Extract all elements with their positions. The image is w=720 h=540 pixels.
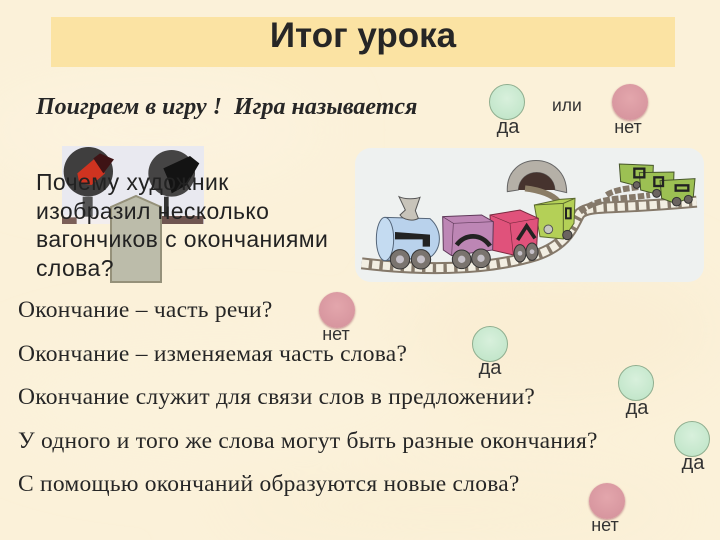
legend: or: или	[552, 95, 582, 115]
tracks	[362, 202, 697, 268]
illustration: railway signals	[62, 146, 204, 224]
question about the picture: Почему художник изобразил несколько вагончиков с окончаниями слова?	[36, 169, 328, 281]
locomotive	[385, 217, 439, 261]
legend: yes button: да	[497, 116, 519, 138]
chimney	[399, 197, 420, 220]
answer 5: no: нет	[591, 515, 619, 535]
pink wagon	[490, 210, 538, 255]
game intro text: Поиграем в игру ! Игра называется	[36, 94, 417, 120]
far wagons	[619, 164, 695, 203]
answer 3: yes	[618, 365, 654, 419]
answer 3: yes: да	[626, 397, 648, 419]
answer 1: no	[318, 292, 356, 344]
legend: no button: нет	[614, 117, 642, 137]
quiz question 4: У одного и того же слова могут быть разные окончания?	[18, 428, 598, 454]
legend: yes button	[489, 84, 525, 138]
answer 4: yes: да	[682, 452, 704, 474]
quiz question 2: Окончание – изменяемая часть слова?	[18, 341, 407, 367]
signal post	[110, 195, 162, 283]
answer 1: no: нет	[322, 324, 350, 344]
wheels	[390, 243, 538, 269]
quiz question 1: Окончание – часть речи?	[18, 297, 273, 323]
answer 5: no	[588, 482, 626, 535]
quiz question 3: Окончание служит для связи слов в предложении?	[18, 384, 535, 410]
legend: no button	[610, 84, 650, 137]
answer 4: yes	[674, 421, 710, 474]
quiz question 5: С помощью окончаний образуются новые слова?	[18, 471, 520, 497]
title banner	[51, 17, 675, 67]
purple wagon	[443, 215, 493, 256]
illustration: train on tracks	[355, 148, 704, 282]
title: Итог урока	[270, 16, 456, 55]
answer 2: yes: да	[479, 357, 501, 379]
answer 2: yes	[472, 326, 508, 379]
tunnel	[507, 161, 567, 193]
green wagon	[534, 198, 575, 239]
